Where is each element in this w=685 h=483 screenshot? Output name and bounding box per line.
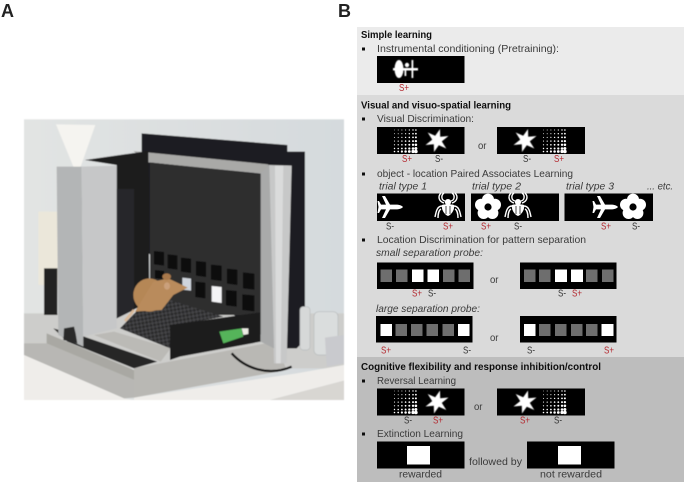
heading: cognitive flexibility: Cognitive flexibility and response inhibition/control (361, 362, 601, 373)
large separation labels: S+ (381, 346, 391, 356)
reversal labels: S- (404, 416, 412, 426)
stimulus screen: large separation 2 (520, 316, 616, 342)
trial type headings: trial type 2 (472, 182, 521, 192)
stimulus screen: trial type 2 (471, 193, 559, 221)
dark object behind chamber (44, 268, 57, 315)
discrimination labels (402, 154, 564, 165)
touchscreen surface (150, 162, 260, 315)
trial type labels: S- (514, 222, 522, 232)
small metal box (325, 335, 344, 367)
text: large separation probe: large separation probe: (376, 304, 480, 315)
small separation labels: S+ (412, 288, 422, 300)
label: rewarded: rewarded (399, 470, 442, 480)
reversal labels (404, 416, 562, 426)
front black housing (170, 312, 261, 360)
stimulus screen: reversal 2 (497, 388, 585, 416)
stimulus screen: reversal 1 (377, 388, 464, 416)
large separation labels: S- (527, 346, 535, 356)
stimulus screen: rewarded (377, 442, 464, 468)
small separation labels: S- (558, 288, 566, 300)
discrimination labels: S- (435, 154, 443, 165)
white table strip right (134, 365, 344, 400)
base plate front (134, 342, 287, 398)
bullet: reversal learning: Reversal Learning (377, 376, 456, 387)
large separation labels: S+ (604, 346, 614, 356)
large separation labels: S- (463, 346, 471, 356)
trial type labels: S+ (601, 222, 611, 232)
trial type headings: trial type 1 (379, 182, 427, 192)
left aluminium tower (57, 167, 83, 347)
stimulus screen: visual discrimination 1 (377, 127, 464, 154)
stimulus screen: large separation 1 (376, 316, 472, 342)
left dark wall (85, 151, 149, 318)
trial type labels: S- (386, 222, 394, 232)
trial type labels: S- (632, 222, 640, 232)
right aluminium column (268, 165, 292, 363)
table edge band left (24, 343, 134, 398)
heading: visual learning: Visual and visuo-spatial learning (361, 100, 511, 112)
stimulus screen: visual discrimination 2 (497, 127, 585, 154)
trial type labels: S+ (443, 222, 453, 232)
heading: simple learning: Simple learning (361, 30, 432, 41)
trial type headings: ... etc. (647, 182, 673, 192)
text: or: or (474, 402, 483, 413)
label: not rewarded: not rewarded (540, 470, 602, 480)
bullet: visual discrimination: Visual Discrimination: (377, 114, 474, 125)
trial type headings (379, 182, 673, 192)
mouse (125, 273, 188, 321)
lit response windows (182, 278, 191, 291)
panel: cognitive flexibility (357, 357, 684, 482)
rear dark panel (142, 133, 305, 348)
panel: simple learning (357, 27, 684, 95)
white table front left (24, 355, 134, 400)
reversal labels: S+ (520, 416, 530, 426)
stimulus screen: trial type 1 (377, 193, 465, 221)
text: or: or (490, 275, 499, 286)
text: or: or (490, 333, 499, 344)
stimulus screen: not rewarded (527, 442, 614, 468)
discrimination labels: S+ (402, 154, 412, 165)
lower right table (270, 381, 344, 400)
table surface (24, 313, 344, 368)
floor grid (120, 300, 223, 348)
photo: touchscreen operant chamber with mouse (24, 119, 344, 400)
reversal labels: S- (554, 416, 562, 426)
panel letter A: A (1, 1, 14, 21)
discrimination labels: S+ (554, 154, 564, 165)
large separation labels (381, 346, 614, 356)
chamber tray (94, 332, 171, 362)
photo background wall (24, 119, 344, 400)
small separation labels (412, 288, 582, 300)
text: or: or (478, 141, 487, 152)
text: small separation probe: small separation probe: (376, 248, 483, 259)
text: followed by: followed by (469, 457, 523, 468)
discrimination labels: S- (523, 154, 531, 165)
panel: visual and visuo-spatial learning (357, 95, 684, 357)
white bottle behind chamber (38, 212, 58, 285)
glass bottles (300, 307, 338, 355)
small separation labels: S+ (572, 288, 582, 300)
stimulus screen: small separation 1 (377, 262, 474, 289)
panel letter B: B (338, 1, 351, 21)
bullet and task name: Instrumental conditioning (Pretraining): (377, 44, 559, 55)
mask holes (154, 251, 254, 311)
bullet: extinction learning: Extinction Learning (377, 429, 463, 440)
label S+: S+ (399, 83, 409, 94)
cable (232, 353, 292, 371)
base plate left strip (47, 333, 134, 380)
trial type labels: S+ (481, 222, 491, 232)
bullet: location discrimination: Location Discrimination for pattern separation (377, 235, 586, 246)
pellet funnel (56, 124, 95, 167)
dark gap below tray (53, 328, 157, 368)
stimulus screen: trial type 3 (564, 194, 653, 221)
reversal labels: S+ (433, 416, 443, 426)
stimulus screen: small separation 2 (520, 262, 616, 289)
small separation labels: S- (428, 288, 436, 300)
top aluminium frame (133, 151, 268, 174)
trial type labels (386, 222, 640, 232)
green connector (219, 328, 243, 343)
trial type headings: trial type 3 (566, 182, 614, 192)
stimulus screen: pretraining (377, 56, 464, 83)
bullet: paired associates: object - location Paired Associates Learning (377, 169, 573, 180)
